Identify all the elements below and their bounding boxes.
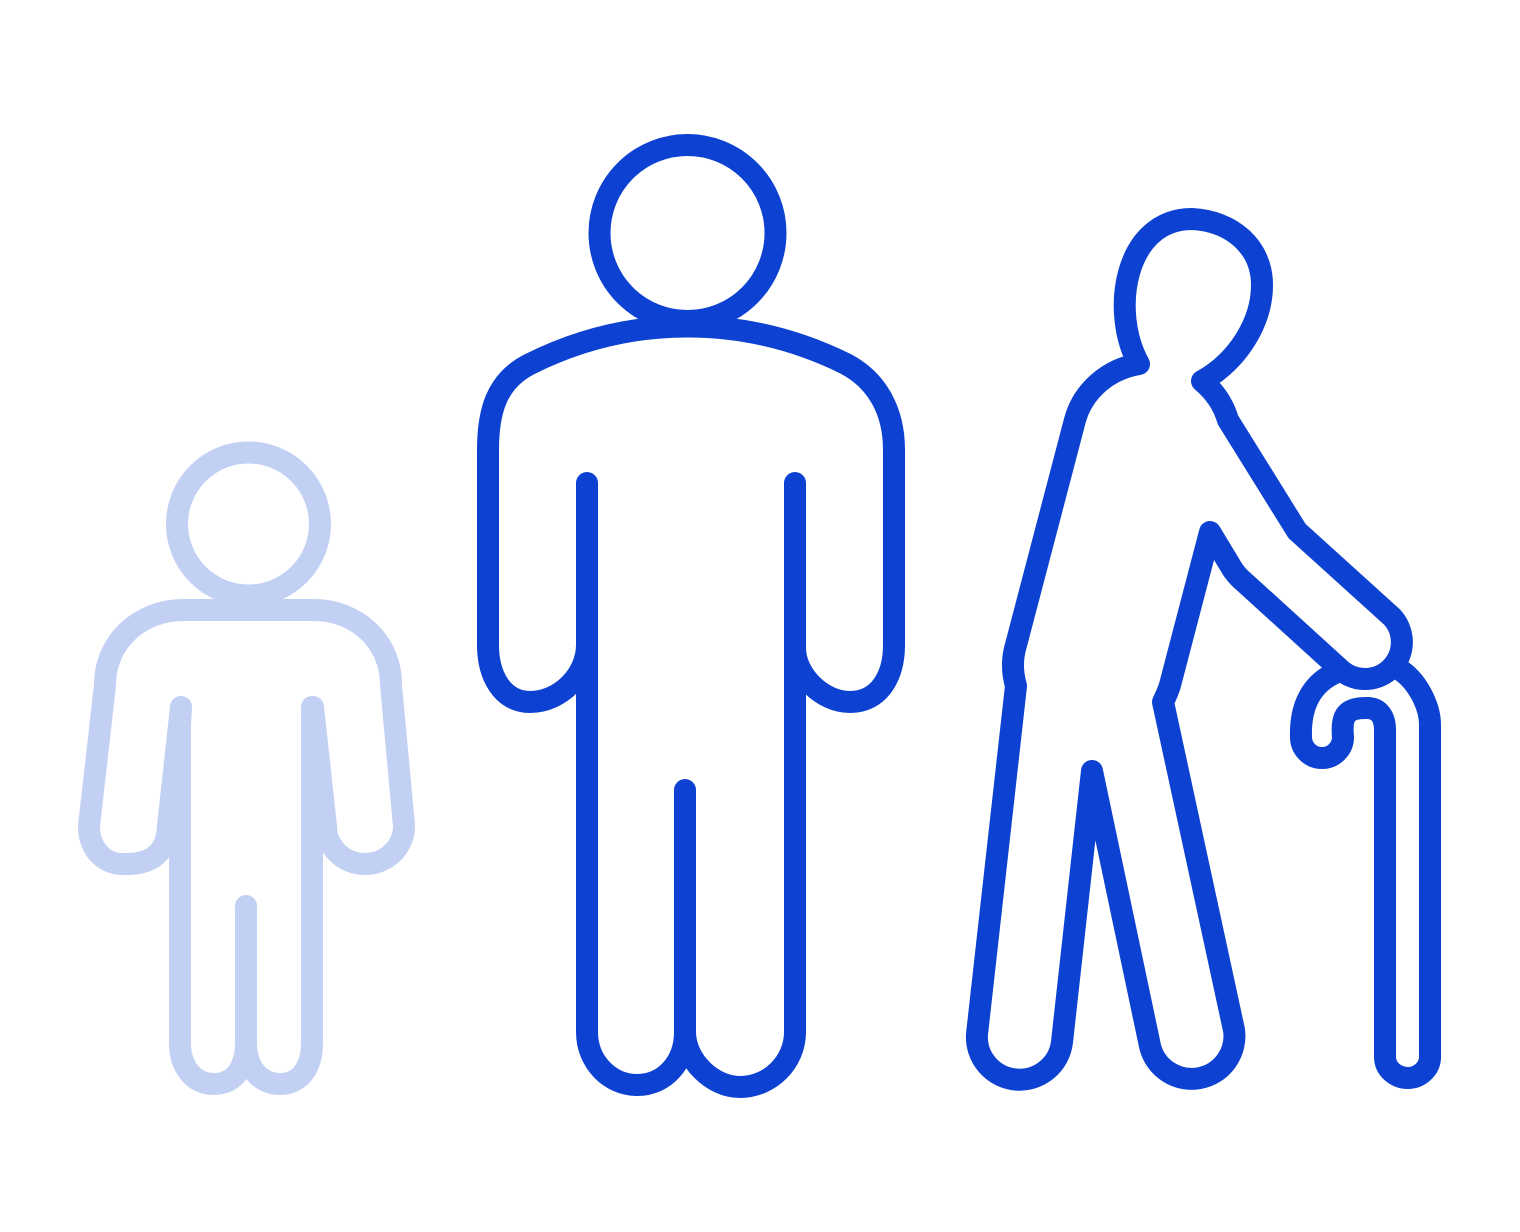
icon: older person with cane — [977, 219, 1430, 1080]
child head — [177, 452, 320, 596]
adult head — [600, 145, 776, 321]
cane — [1301, 668, 1430, 1078]
adult body — [488, 326, 894, 1087]
older person body — [977, 219, 1402, 1080]
child body — [89, 610, 404, 1084]
icon: adult figure — [488, 145, 894, 1087]
icon: child figure — [89, 452, 404, 1084]
